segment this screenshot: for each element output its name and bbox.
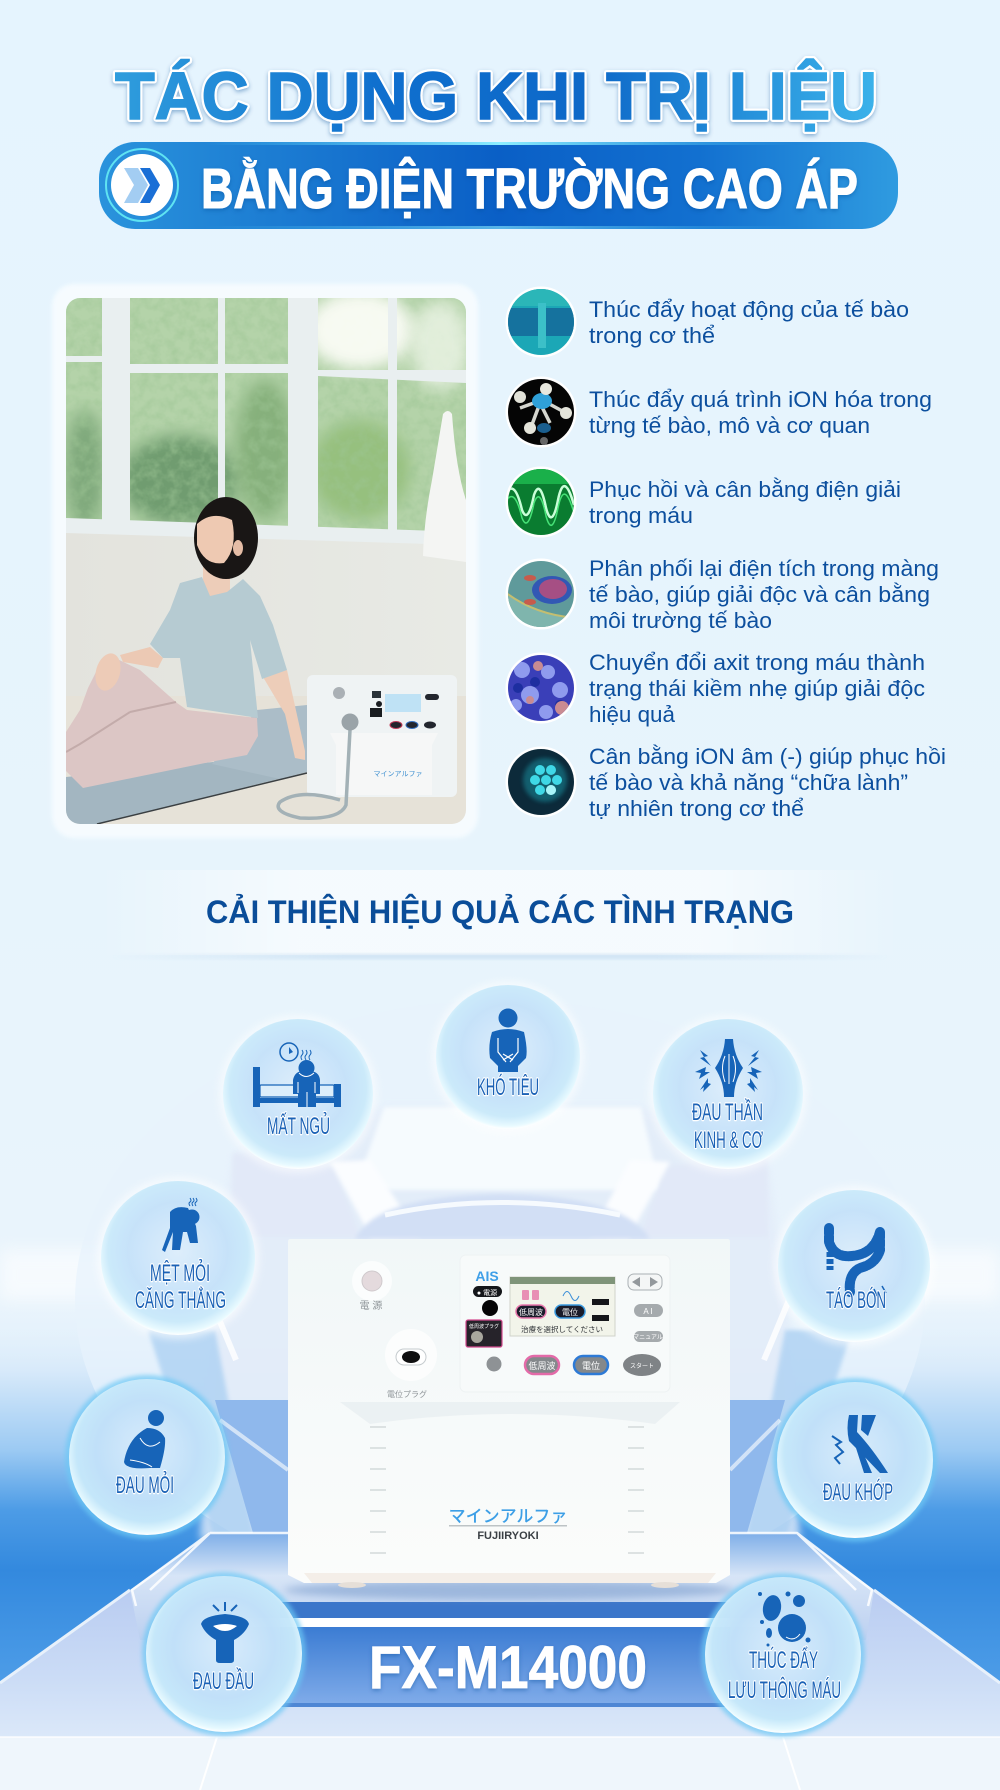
icon: chevrons <box>106 149 178 221</box>
item 5: Chuyển đổi axit trong máu thành <box>589 650 925 675</box>
bubble: đau thần kinh & cơ: ĐAU THẦN <box>692 1098 763 1126</box>
bubble: đau mỏi <box>65 1375 229 1539</box>
bubble: thúc đẩy lưu thông máu <box>701 1573 865 1737</box>
panel: benefits list <box>505 286 946 821</box>
device screen: 低周波 <box>519 1307 543 1317</box>
woman <box>66 497 305 788</box>
item 1: trong cơ thể <box>589 323 715 348</box>
bubble: đau đầu: ĐAU ĐẦU <box>193 1667 254 1695</box>
bubble: đau thần kinh & cơ <box>649 1015 807 1173</box>
heading band: conditions <box>100 870 900 959</box>
mats <box>66 705 307 824</box>
bubble: khó tiêu: KHÓ TIÊU <box>477 1074 539 1101</box>
bubble: táo bón: TÁO BÓN <box>826 1287 886 1314</box>
bubble: đau thần kinh & cơ: KINH & CƠ <box>694 1127 763 1154</box>
subtitle pill <box>99 142 898 229</box>
wall and floor <box>66 533 466 824</box>
control panel: マニュアル <box>633 1334 663 1341</box>
control panel <box>340 1255 680 1424</box>
bubble: đau mỏi: ĐAU MỎI <box>116 1470 174 1499</box>
item 4: Phân phối lại điện tích trong màng <box>589 556 939 581</box>
bubble: mất ngủ: MẤT NGỦ <box>267 1111 330 1140</box>
window foliage <box>65 290 470 538</box>
item 5: trạng thái kiềm nhẹ giúp giải độc <box>589 676 925 701</box>
control panel: 電位 <box>582 1360 600 1371</box>
small device <box>278 675 457 818</box>
item 4: tế bào, giúp giải độc và cân bằng <box>589 582 930 607</box>
device screen: 治療を選択してください <box>521 1324 603 1334</box>
window frames <box>66 298 466 545</box>
bubble: thúc đẩy lưu thông máu: THÚC ĐẨY <box>749 1646 818 1674</box>
bubble: mệt mỏi căng thẳng: MỆT MỎI <box>150 1258 210 1287</box>
item 6: tự nhiên trong cơ thể <box>589 796 804 821</box>
title: TÁC DỤNG KHI TRỊ LIỆU <box>115 59 877 134</box>
item 5: hiệu quả <box>589 702 676 727</box>
control panel: AIS <box>475 1268 499 1284</box>
item 3: trong máu <box>589 503 693 528</box>
item 1 <box>505 286 909 358</box>
device logo <box>449 1507 567 1542</box>
item 3 <box>505 466 901 538</box>
item 2 <box>505 376 932 448</box>
item 6: tế bào và khả năng “chữa lành” <box>589 770 908 795</box>
bubble: mất ngủ <box>219 1015 377 1173</box>
item 4 <box>505 556 939 633</box>
bubble: đau khớp: ĐAU KHỚP <box>823 1479 893 1506</box>
control panel: ● 電源 <box>477 1288 497 1297</box>
bubble: mệt mỏi căng thẳng <box>97 1177 259 1339</box>
panel: photo of woman with device <box>52 284 478 838</box>
item 1: Thúc đẩy hoạt động của tế bào <box>589 297 909 322</box>
title: TÁC DỤNG KHI TRỊ LIỆU <box>115 59 877 134</box>
control panel: A I <box>643 1307 653 1316</box>
control panel: スタート <box>630 1362 654 1370</box>
bubble: đau khớp <box>773 1378 937 1542</box>
bubble: khó tiêu <box>432 981 584 1133</box>
item 6 <box>505 744 946 821</box>
control panel: 電位プラグ <box>387 1389 427 1399</box>
small device: マインアルファ <box>374 770 422 778</box>
vent marks <box>370 1427 644 1553</box>
control panel: 電 源 <box>360 1299 382 1312</box>
bubble: thúc đẩy lưu thông máu: LƯU THÔNG MÁU <box>728 1676 841 1704</box>
device logo: マインアルファ <box>449 1507 567 1526</box>
backdrop: tunnel scene behind device <box>0 1000 1000 1690</box>
bubble: đau đầu <box>142 1572 306 1736</box>
main device <box>284 1239 734 1600</box>
item 2: Thúc đẩy quá trình iON hóa trong <box>589 387 932 412</box>
bubble: mệt mỏi căng thẳng: CĂNG THẲNG <box>135 1286 226 1314</box>
platform floor <box>0 1590 1000 1790</box>
platform glass tray <box>130 1533 874 1640</box>
item 4: môi trường tế bào <box>589 608 772 633</box>
bubble: táo bón <box>774 1186 934 1346</box>
item 2: từng tế bào, mô và cơ quan <box>589 413 870 438</box>
device screen: 電位 <box>562 1307 578 1317</box>
model band with name <box>280 1627 730 1707</box>
device screen <box>510 1277 615 1336</box>
control panel: 低周波プラグ <box>469 1323 499 1330</box>
item 3: Phục hồi và cân bằng điện giải <box>589 477 901 502</box>
control panel: 低周波 <box>528 1360 556 1371</box>
curtain <box>423 411 466 562</box>
device logo: FUJIIRYOKI <box>477 1530 539 1542</box>
heading band: conditions: CẢI THIỆN HIỆU QUẢ CÁC TÌNH TRẠNG <box>206 894 794 930</box>
model name: FX-M14000 <box>369 1634 647 1701</box>
item 5 <box>505 650 925 727</box>
item 6: Cân bằng iON âm (-) giúp phục hồi <box>589 744 946 769</box>
